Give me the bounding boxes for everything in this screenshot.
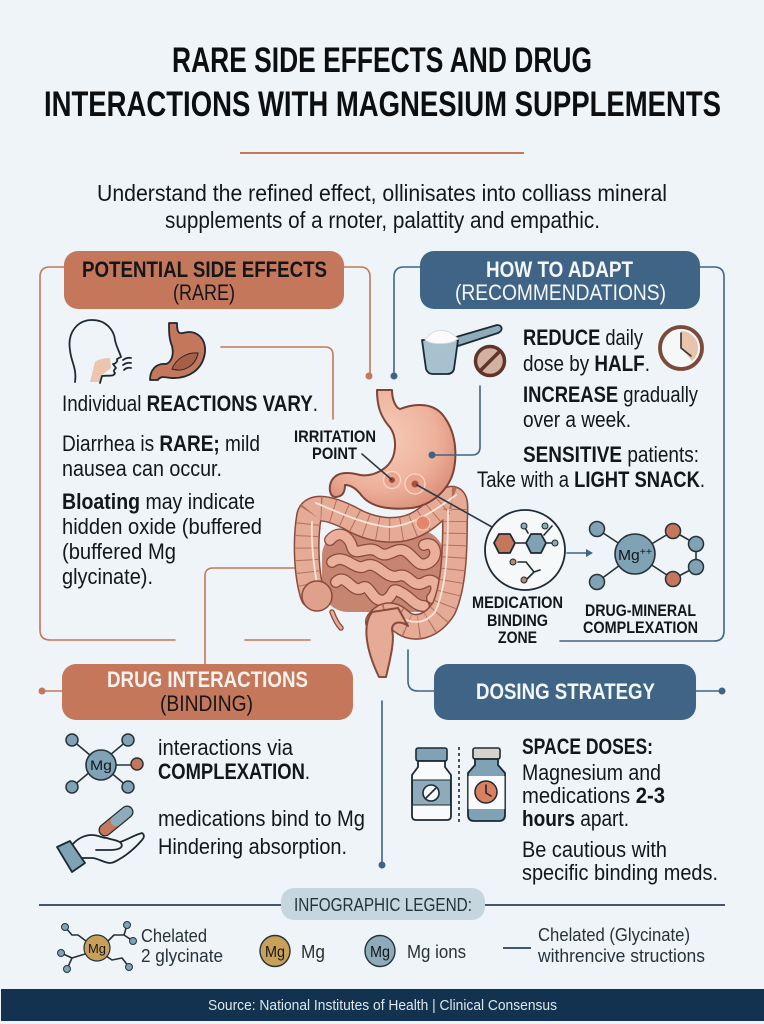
- legend item: chelated glycinate: 2 glycinate: [141, 945, 223, 966]
- large intestine: [302, 495, 456, 677]
- heading: how to adapt: HOW TO ADAPT: [486, 257, 633, 282]
- legend heading: INFOGRAPHIC LEGEND:: [294, 895, 472, 915]
- small intestine: [322, 530, 444, 612]
- legend item: chelated glycinate: Chelated: [141, 925, 207, 946]
- text: recommendations body: Take with a LIGHT SNACK.: [477, 467, 705, 492]
- title: [44, 41, 721, 124]
- text: drug interactions body: medications bind to Mg: [158, 806, 365, 831]
- text: drug interactions body: [158, 735, 365, 859]
- icon: head with nausea: [70, 320, 131, 383]
- subtitle: supplements of a rnoter, palattity and empathic.: [165, 207, 600, 233]
- heading: drug interactions: DRUG INTERACTIONS: [107, 667, 308, 692]
- label: drug-mineral complexation: DRUG-MINERAL: [585, 602, 696, 620]
- icon: stomach: [150, 323, 205, 380]
- panel: drug interactions: [57, 664, 365, 872]
- icon: measuring scoop: [422, 325, 502, 374]
- icon: two bottles: [412, 747, 505, 822]
- text: recommendations body: dose by HALF.: [523, 351, 650, 376]
- text: dosing strategy body: specific binding meds.: [522, 860, 718, 885]
- legend item: chelated glycinate: Mg: [88, 941, 106, 956]
- panel: how to adapt: [420, 251, 705, 492]
- text: dosing strategy body: [522, 734, 718, 885]
- text: dosing strategy body: hours apart.: [522, 806, 629, 831]
- diagram: medication binding zone: [485, 510, 565, 590]
- text: recommendations body: INCREASE gradually: [523, 382, 699, 407]
- text: recommendations body: SENSITIVE patients:: [523, 442, 699, 467]
- heading: dosing strategy: DOSING STRATEGY: [476, 679, 655, 704]
- legend item: Mg ions: Mg ions: [407, 941, 466, 962]
- text: recommendations body: over a week.: [523, 407, 631, 432]
- legend item: Mg: [260, 936, 325, 966]
- footer: source: Source: National Institutes of Health | Clinical Consensus: [208, 997, 557, 1014]
- label: medication binding zone: [472, 594, 563, 647]
- text: dosing strategy body: Be cautious with: [522, 837, 667, 862]
- icon: hand with capsule: [57, 812, 144, 872]
- heading: how to adapt: (RECOMMENDATIONS): [455, 280, 666, 305]
- legend heading: [281, 888, 485, 920]
- label: medication binding zone: MEDICATION: [472, 594, 563, 612]
- label: irritation point: POINT: [312, 445, 357, 463]
- label: drug-mineral complexation: [583, 602, 698, 637]
- text: side effects body: Bloating may indicate: [62, 489, 255, 514]
- heading: dosing strategy: [434, 664, 696, 720]
- title: RARE SIDE EFFECTS AND DRUG: [172, 41, 592, 80]
- text: side effects body: glycinate).: [62, 564, 153, 589]
- legend item: chelated glycinate: [58, 922, 223, 972]
- diagram: drug-mineral complex: Mg: [618, 547, 639, 564]
- icon: no sign: [476, 346, 504, 376]
- text: side effects body: nausea can occur.: [62, 456, 222, 481]
- heading: potential side effects: [64, 251, 344, 309]
- text: drug interactions body: interactions via: [158, 735, 293, 760]
- text: side effects body: Diarrhea is RARE; mild: [62, 431, 260, 456]
- subtitle: [97, 180, 667, 233]
- heading: drug interactions: [62, 664, 353, 720]
- legend item: chelated line: [503, 924, 705, 966]
- text: side effects body: (buffered Mg: [62, 539, 176, 564]
- illustration: digestive system: [294, 390, 492, 677]
- heading: potential side effects: POTENTIAL SIDE EFFECTS: [82, 257, 327, 282]
- text: dosing strategy body: Magnesium and: [522, 760, 661, 785]
- legend item: chelated line: Chelated (Glycinate): [538, 924, 690, 945]
- text: dosing strategy body: SPACE DOSES:: [522, 734, 653, 759]
- diagram: drug-mineral complex: [590, 522, 704, 590]
- legend item: Mg ions: Mg: [370, 944, 390, 961]
- panel: dosing strategy: [412, 664, 718, 885]
- legend item: Mg: Mg: [265, 944, 285, 961]
- text: recommendations body: [477, 325, 705, 492]
- legend item: Mg ions: [365, 936, 466, 966]
- text: drug interactions body: Hindering absorption.: [158, 834, 347, 859]
- label: medication binding zone: ZONE: [498, 629, 537, 647]
- text: dosing strategy body: medications 2-3: [522, 783, 665, 808]
- panel: potential side effects: [62, 251, 344, 589]
- heading: how to adapt: [420, 251, 700, 309]
- text: drug interactions body: COMPLEXATION.: [158, 759, 310, 784]
- connector lines: side effects frame: [40, 267, 372, 664]
- label: drug-mineral complexation: COMPLEXATION: [583, 619, 698, 637]
- label: irritation point: [294, 428, 376, 463]
- text: side effects body: [62, 391, 318, 589]
- marker lines on the stomach: [362, 452, 492, 527]
- label: irritation point: IRRITATION: [294, 428, 376, 446]
- footer: source: [1, 989, 764, 1021]
- legend: [39, 888, 725, 972]
- icon: clock: [660, 327, 702, 369]
- icon: Mg complex: [66, 734, 143, 793]
- text: side effects body: Individual REACTIONS VARY.: [62, 391, 318, 416]
- subtitle: Understand the refined effect, ollinisates into colliass mineral: [97, 180, 667, 206]
- legend item: Mg: Mg: [301, 941, 325, 962]
- heading: potential side effects: (RARE): [173, 280, 235, 305]
- icon: Mg complex: Mg: [90, 758, 112, 773]
- connector lines: recommendations frame: [38, 267, 726, 868]
- stomach: [330, 390, 455, 509]
- text: side effects body: hidden oxide (buffered: [62, 514, 262, 539]
- diagram: drug-mineral complex: ++: [640, 547, 652, 558]
- legend item: chelated line: withrencive structions: [537, 945, 705, 966]
- text: recommendations body: REDUCE daily: [523, 325, 644, 350]
- arrow: binding to complexation: [567, 549, 593, 557]
- label: medication binding zone: BINDING: [487, 612, 548, 630]
- heading: drug interactions: (BINDING): [160, 691, 253, 716]
